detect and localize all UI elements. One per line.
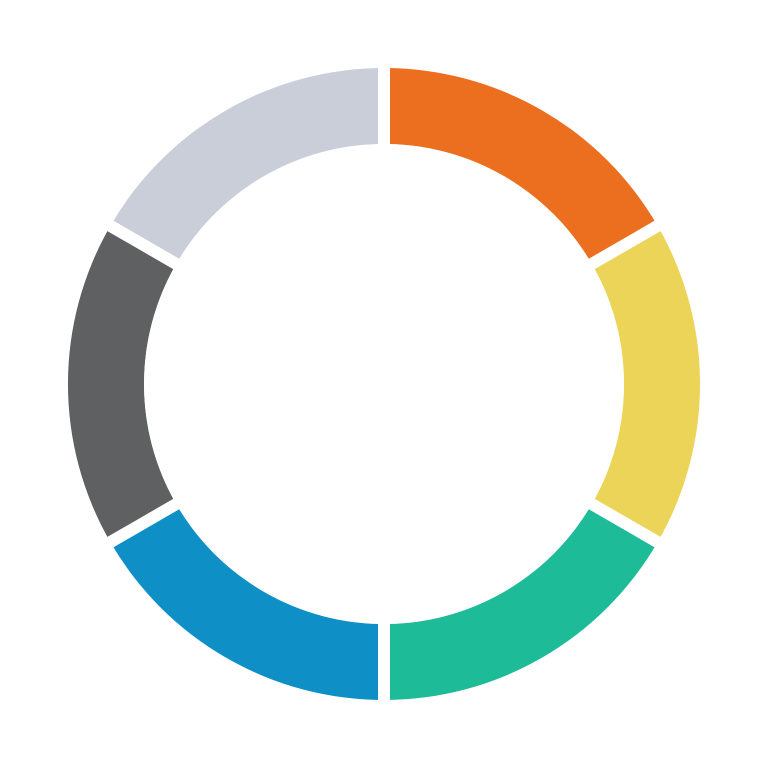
segment: green (384, 504, 658, 700)
segment: dark gray (68, 226, 176, 542)
segment: yellow (592, 226, 700, 542)
segment: orange (384, 68, 658, 264)
segment: light gray (110, 68, 384, 264)
segment: blue (110, 504, 384, 700)
